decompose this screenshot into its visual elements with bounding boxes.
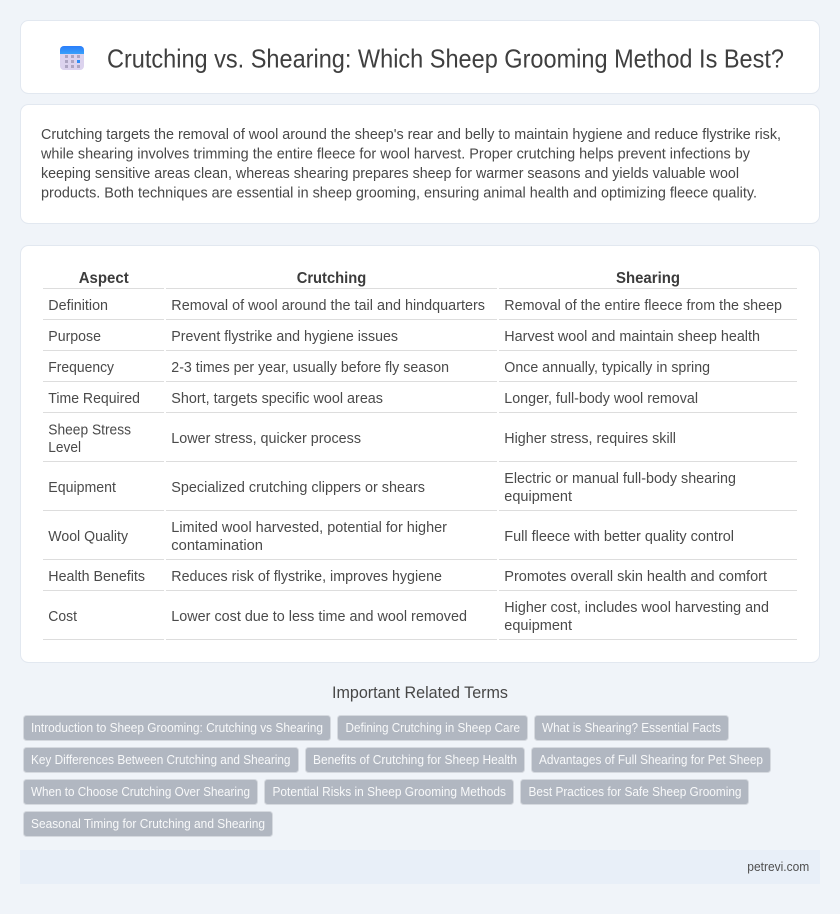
row: purpose: Harvest wool and maintain sheep health bbox=[504, 329, 760, 345]
tag bbox=[264, 780, 514, 804]
row: cost: equipment bbox=[504, 618, 572, 634]
row: equipment: equipment bbox=[504, 489, 572, 505]
row: time required: Longer, full-body wool removal bbox=[504, 391, 698, 407]
footer bar bbox=[20, 850, 820, 884]
row: wool quality: Full fleece with better quality control bbox=[504, 529, 734, 545]
row: equipment bbox=[48, 471, 736, 505]
panel: introduction bbox=[20, 104, 820, 224]
text block: introduction paragraph: products. Both techniques are essential in sheep grooming, ensuring animal health and optimizing fleece quality. bbox=[41, 185, 757, 201]
row: purpose bbox=[48, 329, 760, 345]
text block: introduction paragraph: while shearing involves trimming the entire fleece for wool harvest. Proper crutching helps prevent infections by bbox=[40, 146, 751, 162]
row: definition: Definition bbox=[48, 298, 108, 314]
text block: introduction paragraph: keeping sensitive areas clean, whereas shearing prepares sheep for warmer seasons and yields valuable wool bbox=[41, 166, 739, 182]
table header: Aspect bbox=[79, 270, 129, 287]
tag: Key Differences Between Crutching and Shearing bbox=[31, 753, 290, 767]
row: sheep stress level: Lower stress, quicker process bbox=[171, 431, 361, 447]
text block: introduction paragraph bbox=[40, 127, 781, 201]
icon: calendar bbox=[60, 46, 84, 70]
tag: When to Choose Crutching Over Shearing bbox=[31, 785, 250, 799]
row: health benefits: Reduces risk of flystrike, improves hygiene bbox=[171, 569, 442, 585]
tag bbox=[24, 716, 330, 740]
tag: Introduction to Sheep Grooming: Crutching vs Shearing bbox=[31, 721, 323, 735]
row: health benefits: Health Benefits bbox=[48, 569, 145, 585]
row: cost: Higher cost, includes wool harvesting and bbox=[504, 600, 769, 616]
tag: Seasonal Timing for Crutching and Shearing bbox=[31, 817, 265, 831]
row: wool quality bbox=[48, 520, 734, 554]
row: frequency: 2-3 times per year, usually before fly season bbox=[171, 360, 449, 376]
title: Crutching vs. Shearing: Which Sheep Grooming Method Is Best? bbox=[107, 46, 784, 74]
tag: Potential Risks in Sheep Grooming Methods bbox=[272, 785, 506, 799]
row: equipment: Equipment bbox=[48, 480, 116, 496]
tag: Benefits of Crutching for Sheep Health bbox=[313, 753, 517, 767]
row: health benefits bbox=[48, 569, 767, 585]
tag bbox=[534, 716, 728, 740]
row: wool quality: Limited wool harvested, potential for higher bbox=[171, 520, 447, 536]
row: sheep stress level: Level bbox=[48, 440, 81, 456]
tag bbox=[24, 812, 272, 836]
row: time required: Short, targets specific wool areas bbox=[171, 391, 383, 407]
row: purpose: Purpose bbox=[48, 329, 101, 345]
row: wool quality: contamination bbox=[171, 538, 263, 554]
heading: important related terms: Important Related Terms bbox=[332, 684, 508, 702]
row: frequency bbox=[48, 360, 710, 376]
row: definition bbox=[48, 298, 782, 314]
tag bbox=[338, 716, 528, 740]
tag: What is Shearing? Essential Facts bbox=[542, 721, 721, 735]
text block: introduction paragraph: Crutching targets the removal of wool around the sheep's rear and belly to maintain hygiene and reduce flystrike risk, bbox=[41, 127, 781, 143]
footer source text: petrevi.com bbox=[747, 859, 809, 874]
row: wool quality: Wool Quality bbox=[48, 529, 129, 545]
panel: header bbox=[20, 20, 820, 94]
table row rules bbox=[43, 288, 797, 640]
row: time required: Time Required bbox=[48, 391, 140, 407]
row: cost: Cost bbox=[48, 609, 77, 625]
row: sheep stress level bbox=[48, 422, 676, 456]
tag bbox=[24, 748, 298, 772]
row: time required bbox=[48, 391, 698, 407]
tag: Defining Crutching in Sheep Care bbox=[346, 721, 520, 735]
row: cost: Lower cost due to less time and wool removed bbox=[171, 609, 467, 625]
row: equipment: Specialized crutching clippers or shears bbox=[171, 480, 425, 496]
row: sheep stress level: Sheep Stress bbox=[48, 422, 131, 438]
tag bbox=[24, 780, 258, 804]
tag: Advantages of Full Shearing for Pet Sheep bbox=[539, 753, 763, 767]
tag bbox=[520, 780, 748, 804]
table header bbox=[79, 270, 680, 287]
row: equipment: Electric or manual full-body shearing bbox=[504, 471, 736, 487]
panel: related term tags bbox=[24, 716, 770, 836]
tag bbox=[306, 748, 524, 772]
row: health benefits: Promotes overall skin health and comfort bbox=[504, 569, 767, 585]
table header: Crutching bbox=[297, 270, 366, 287]
row: definition: Removal of wool around the tail and hindquarters bbox=[171, 298, 485, 314]
tag bbox=[532, 748, 770, 772]
row: sheep stress level: Higher stress, requires skill bbox=[504, 431, 676, 447]
table header: Shearing bbox=[616, 270, 680, 287]
tag: Best Practices for Safe Sheep Grooming bbox=[528, 785, 742, 799]
row: frequency: Once annually, typically in spring bbox=[504, 360, 710, 376]
row: cost bbox=[48, 600, 769, 634]
row: definition: Removal of the entire fleece from the sheep bbox=[504, 298, 782, 314]
row: frequency: Frequency bbox=[48, 360, 115, 376]
row: purpose: Prevent flystrike and hygiene issues bbox=[171, 329, 398, 345]
panel: comparison table bbox=[20, 246, 820, 662]
